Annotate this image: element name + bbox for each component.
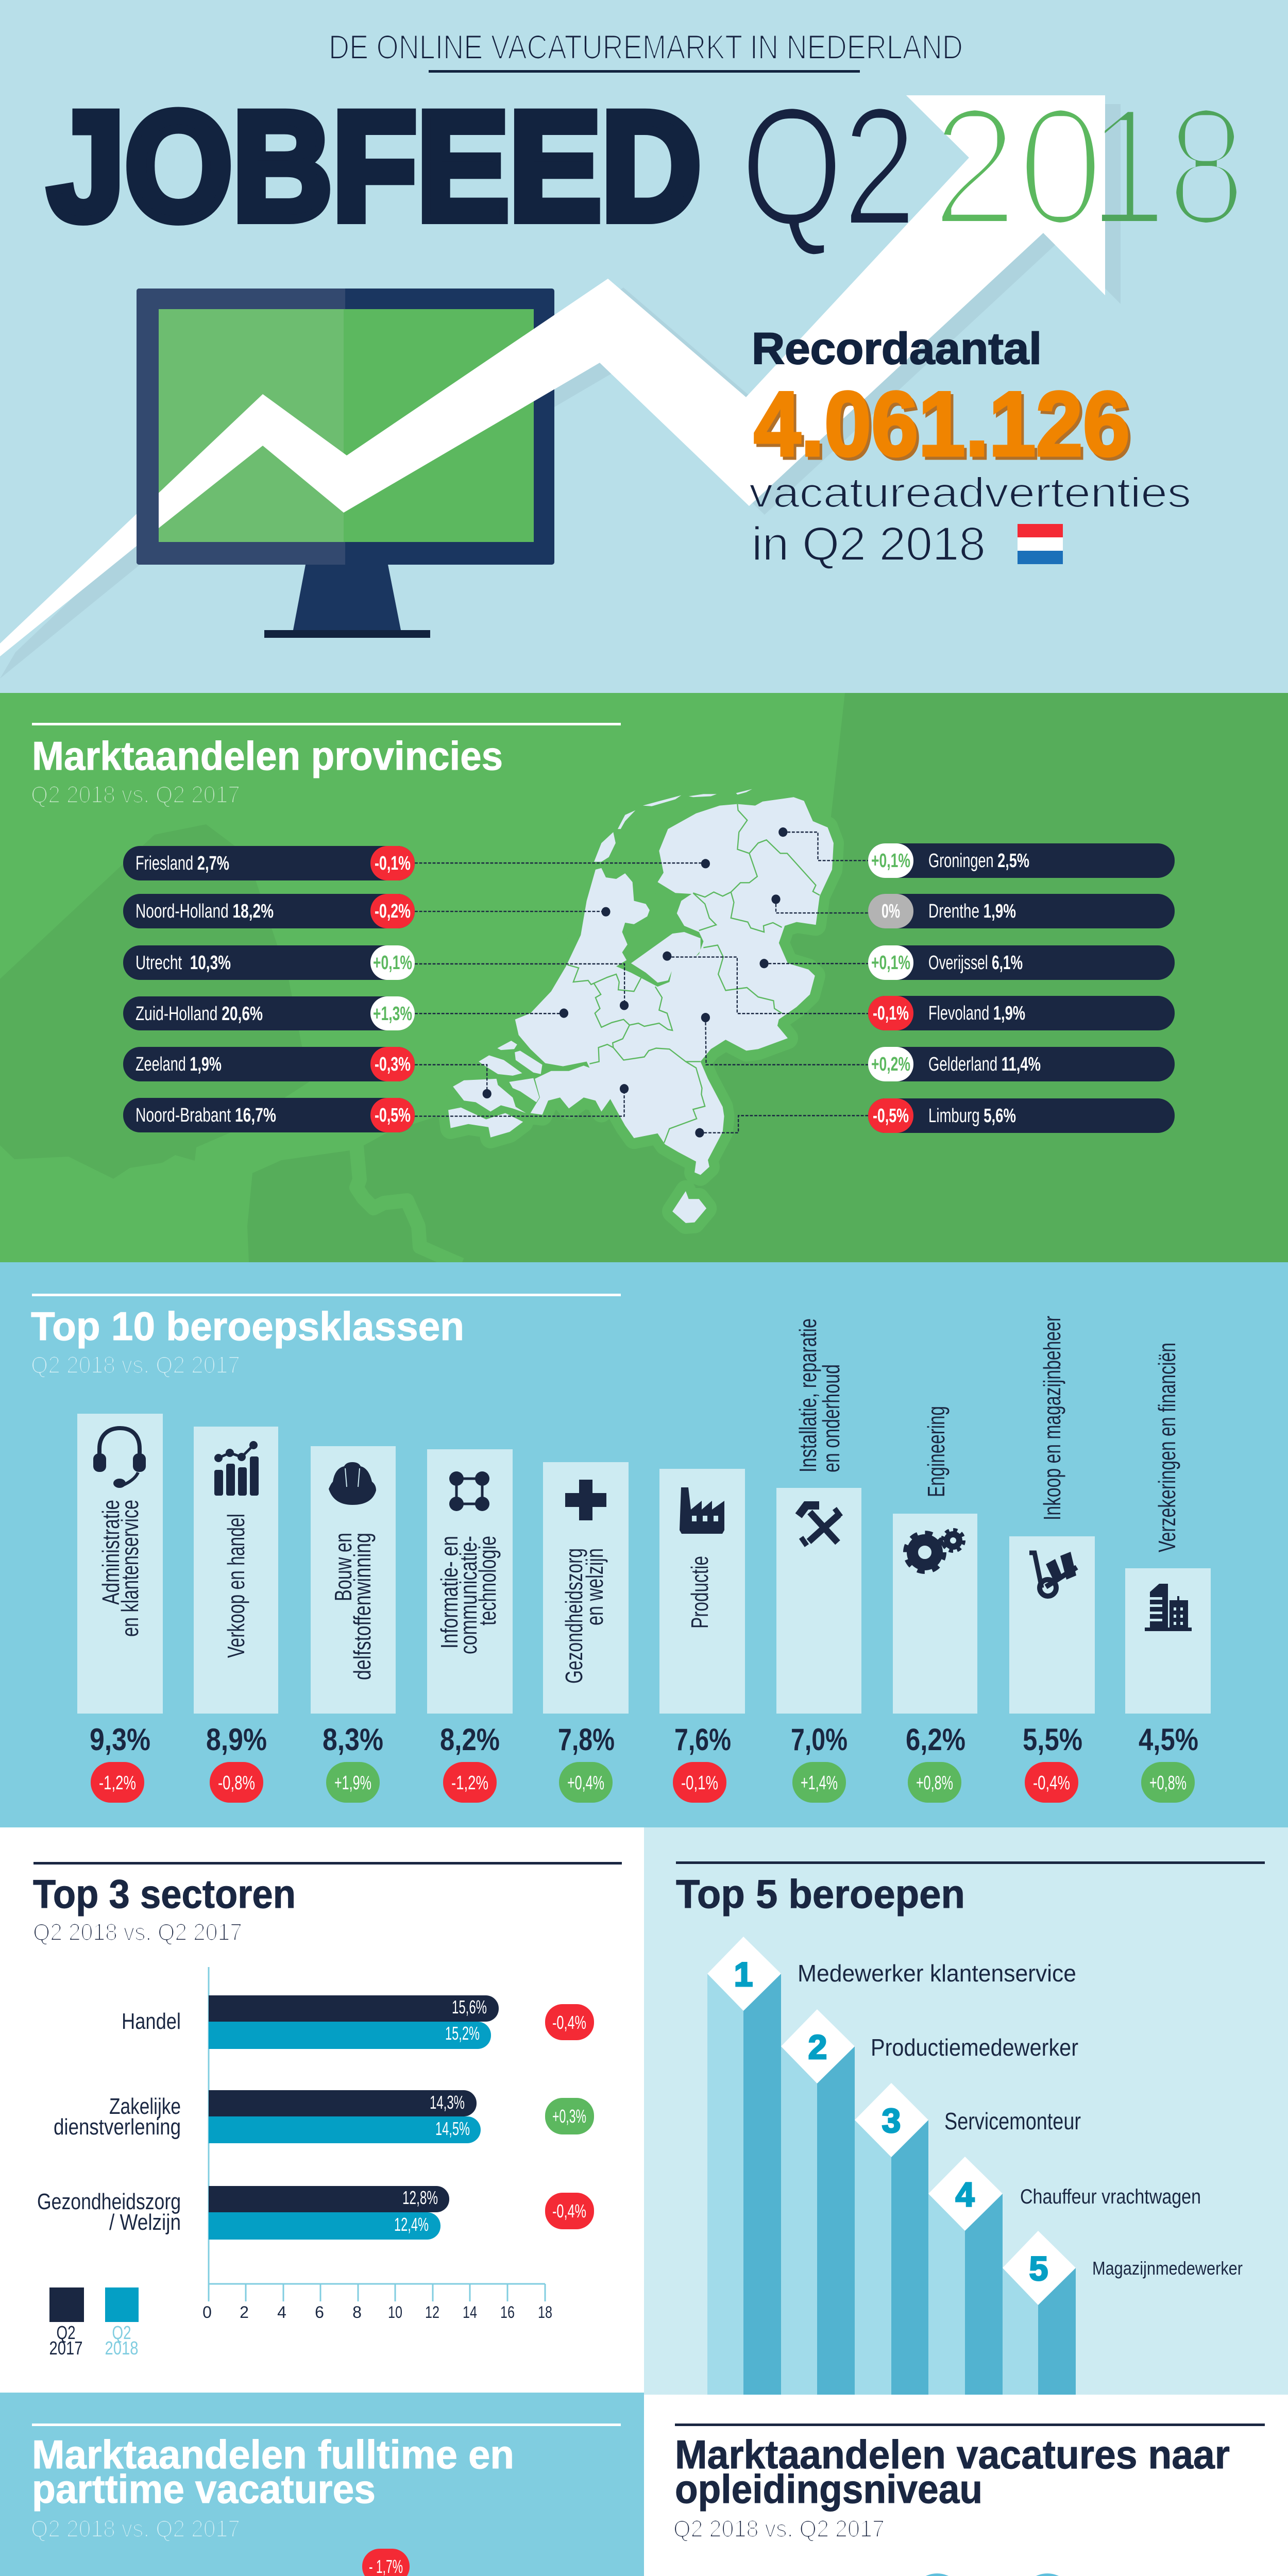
title: JOBFEED [48, 79, 701, 252]
change badges: +0,8% [1149, 1772, 1187, 1794]
panel: fulltime en parttime [0, 2393, 644, 2576]
bar chart: 18 [538, 2303, 552, 2321]
stepped columns: 5 [1029, 2249, 1048, 2287]
row: Noord-Holland: -0,2% [375, 901, 411, 922]
values: 8,9% [206, 1722, 267, 1757]
row: Groningen: Groningen 2,5% [928, 850, 1029, 872]
row: Utrecht: +0,1% [373, 952, 412, 974]
panel: top 3 sectoren [0, 1827, 644, 2393]
row: Drenthe [868, 894, 1175, 928]
occupation labels: Magazijnmedewerker [1092, 2258, 1243, 2279]
values: 7,0% [791, 1722, 848, 1757]
bar chart: 12 [425, 2303, 439, 2321]
bar chart: -0,4% [552, 2200, 586, 2222]
background: header [0, 0, 1288, 693]
rotated labels: Verzekeringen en financiën [1154, 1343, 1180, 1552]
bar chart: 14,3% [430, 2092, 465, 2113]
change badges [91, 1762, 1195, 1803]
row: Zuid-Holland: +1,3% [373, 1003, 412, 1025]
row: Friesland: Friesland 2,7% [135, 853, 229, 874]
row: Overijssel: Overijssel 6,1% [928, 952, 1023, 974]
icon: trolley [1029, 1552, 1077, 1596]
title [48, 73, 1246, 260]
icon: headset [93, 1428, 146, 1488]
bar chart: 14 [463, 2303, 477, 2321]
row: Noord-Holland [123, 894, 415, 928]
bar chart: 2 [240, 2303, 249, 2321]
row: Zeeland [123, 1047, 415, 1081]
rotated labels: en klantenservice [116, 1500, 143, 1637]
panel: provinces [0, 693, 1288, 1265]
values: 7,6% [674, 1722, 731, 1757]
change badges: +0,4% [567, 1772, 604, 1794]
stepped columns: 2 [808, 2028, 827, 2066]
callout: record number: 4.061.126 [754, 372, 1130, 475]
stepped columns: 1 [734, 1955, 753, 1993]
icon: monitor [137, 289, 554, 638]
rotated labels: Inkoop en magazijnbeheer [1039, 1316, 1065, 1520]
stepped columns: 3 [882, 2102, 901, 2140]
panel: top 5 beroepen [644, 1827, 1288, 2395]
bar chart: 12,4% [394, 2214, 429, 2235]
callout: record number: in Q2 2018 [752, 518, 986, 570]
row: Overijssel: +0,1% [871, 952, 910, 974]
row: Utrecht: Utrecht 10,3% [135, 952, 231, 974]
row: Groningen: +0,1% [871, 850, 910, 872]
row: Flevoland [868, 996, 1175, 1030]
bar chart: 4 [277, 2303, 286, 2321]
icon: Dutch flag [1018, 524, 1063, 564]
rotated labels: communicatie- [455, 1536, 482, 1654]
change badges: -1,2% [451, 1772, 488, 1794]
row: Noord-Brabant [123, 1098, 415, 1132]
rotated labels: en onderhoud [818, 1364, 844, 1472]
bar chart [37, 1967, 594, 2321]
row: Gelderland: Gelderland 11,4% [928, 1054, 1041, 1075]
stepped columns [707, 1937, 1076, 2395]
bar chart: 6 [315, 2303, 324, 2321]
arrow behind monitor [0, 95, 1105, 656]
row: Gelderland [868, 1047, 1175, 1081]
change badges: -0,8% [218, 1772, 255, 1794]
heading: Top 10 beroepsklassen [31, 1303, 464, 1349]
row: Noord-Brabant: Noord-Brabant 16,7% [135, 1105, 276, 1126]
row: Zeeland: -0,3% [375, 1054, 411, 1075]
rotated labels: Informatie- en [436, 1536, 463, 1649]
bar chart: Handel [122, 2009, 181, 2034]
values: 9,3% [90, 1722, 150, 1757]
stepped columns: 4 [956, 2175, 975, 2213]
heading: Top 5 beroepen [676, 1871, 965, 1917]
change badges: +1,4% [801, 1772, 838, 1794]
row: Utrecht [123, 945, 415, 980]
change badges: -0,4% [1033, 1772, 1070, 1794]
heading: Top 3 sectoren [33, 1871, 296, 1917]
heading [673, 2424, 1265, 2542]
rotated labels: Installatie, reparatie [794, 1318, 821, 1472]
row: Friesland [123, 846, 415, 880]
rotated labels: Administratie [97, 1500, 124, 1605]
rotated labels: Verkoop en handel [223, 1514, 249, 1658]
heading [676, 1861, 1265, 1917]
heading: Marktaandelen fulltime en [32, 2432, 514, 2477]
row: Noord-Holland: Noord-Holland 18,2% [135, 901, 274, 922]
person 2018 [1036, 2573, 1059, 2576]
arrow over screen [159, 95, 1105, 528]
icon: sales chart [214, 1441, 259, 1496]
rotated labels: Gezondheidszorg [561, 1548, 587, 1684]
row: Drenthe: 0% [882, 901, 900, 922]
map background land [0, 693, 1288, 1265]
heading: Q2 2018 vs. Q2 2017 [33, 1919, 242, 1945]
callout: record number: Recordaantal [752, 324, 1042, 374]
subtitle: DE ONLINE VACATUREMARKT IN NEDERLAND [329, 28, 963, 66]
heading: Q2 2018 vs. Q2 2017 [31, 781, 240, 808]
bar chart: 14,5% [435, 2118, 470, 2139]
heading: Q2 2018 vs. Q2 2017 [31, 2515, 240, 2542]
heading [31, 723, 621, 808]
rotated labels: en welzijn [581, 1548, 608, 1625]
bar chart: / Welzijn [109, 2210, 181, 2235]
rotated labels: Productie [686, 1556, 713, 1629]
icon: helmet [329, 1462, 376, 1505]
title: 18 [1088, 73, 1246, 260]
bar chart [51, 2549, 424, 2576]
values: 8,2% [440, 1722, 500, 1757]
bar chart: 8 [352, 2303, 362, 2321]
heading: Marktaandelen vacatures naar [675, 2432, 1230, 2477]
row: Overijssel [868, 945, 1175, 980]
values: 5,5% [1023, 1722, 1082, 1757]
legend: Q2 [112, 2322, 131, 2343]
row: Flevoland: Flevoland 1,9% [928, 1003, 1025, 1024]
rotated labels: Bouw en [330, 1533, 357, 1601]
icon: building [1145, 1584, 1192, 1631]
heading: Q2 2018 vs. Q2 2017 [31, 1351, 240, 1378]
heading: Marktaandelen provincies [32, 733, 503, 778]
title: 20 [931, 73, 1104, 260]
change badges: -1,2% [99, 1772, 136, 1794]
bar chart: 10 [388, 2303, 402, 2321]
bar chart: 15,2% [445, 2023, 480, 2044]
values: 8,3% [323, 1722, 383, 1757]
icon: plus [565, 1480, 606, 1520]
rotated labels: Engineering [923, 1406, 950, 1497]
heading [31, 1294, 621, 1378]
heading: opleidingsniveau [675, 2466, 982, 2512]
row: Zeeland: Zeeland 1,9% [135, 1054, 222, 1075]
legend: 2018 [105, 2337, 138, 2359]
legend [49, 2287, 139, 2359]
rotated labels: delfstoffenwinning [349, 1533, 376, 1680]
arrow shadow [0, 104, 1121, 679]
heading [33, 1862, 622, 1945]
callout: record number: vacatureadvertenties [749, 469, 1191, 516]
occupation labels: Chauffeur vrachtwagen [1020, 2185, 1201, 2208]
panel: opleidingsniveau [675, 2424, 1265, 2576]
row: Gelderland: +0,2% [871, 1054, 910, 1075]
occupation labels [798, 1960, 1243, 2279]
bar chart: 15,6% [452, 1996, 487, 2018]
values: 6,2% [906, 1722, 965, 1757]
heading: Q2 2018 vs. Q2 2017 [673, 2515, 885, 2542]
change badges: +0,8% [916, 1772, 953, 1794]
title: Q2 [741, 73, 916, 260]
row: Limburg: Limburg 5,6% [928, 1105, 1016, 1127]
row: Noord-Brabant: -0,5% [375, 1105, 411, 1126]
icon: tools [799, 1505, 841, 1546]
rotated labels: technologie [474, 1536, 501, 1625]
change badges: +1,9% [334, 1772, 371, 1794]
row: Limburg: -0,5% [873, 1105, 909, 1127]
bar chart: 0 [202, 2303, 212, 2321]
values: 4,5% [1139, 1722, 1198, 1757]
values [90, 1722, 1198, 1757]
bar chart: Gezondheidszorg [37, 2189, 181, 2214]
heading [31, 2424, 621, 2542]
bar chart: -0,4% [552, 2012, 586, 2033]
legend: Q2 [57, 2322, 75, 2343]
rotated labels [97, 1316, 1180, 1684]
row: Flevoland: -0,1% [873, 1003, 909, 1024]
map of the Netherlands [415, 789, 868, 1223]
bar chart: 12,8% [402, 2187, 438, 2208]
icon: network [449, 1471, 489, 1511]
icon: factory [680, 1487, 724, 1534]
bar chart: dienstverlening [54, 2114, 181, 2140]
legend: 2017 [49, 2337, 82, 2359]
bar chart: 16 [500, 2303, 515, 2321]
occupation labels: Productiemedewerker [871, 2034, 1078, 2061]
bars [77, 1414, 1211, 1714]
person 2017 [926, 2573, 948, 2576]
heading: parttime vacatures [32, 2466, 376, 2512]
row: Groningen [868, 843, 1175, 878]
occupation labels: Servicemonteur [944, 2108, 1081, 2134]
callout: record number [749, 324, 1191, 570]
panel: top 10 beroepsklassen [0, 1262, 1288, 1827]
row: Drenthe: Drenthe 1,9% [928, 901, 1016, 922]
row: Zuid-Holland: Zuid-Holland 20,6% [135, 1003, 263, 1025]
icon: gears [906, 1530, 963, 1571]
row: Limburg [868, 1098, 1175, 1133]
row: Zuid-Holland [123, 996, 415, 1030]
change badges: -0,1% [681, 1772, 718, 1794]
row: Friesland: -0,1% [375, 853, 411, 874]
bar chart: Zakelijke [109, 2094, 181, 2119]
values: 7,8% [558, 1722, 615, 1757]
occupation labels: Medewerker klantenservice [798, 1960, 1076, 1987]
bar chart: +0,3% [552, 2106, 586, 2127]
